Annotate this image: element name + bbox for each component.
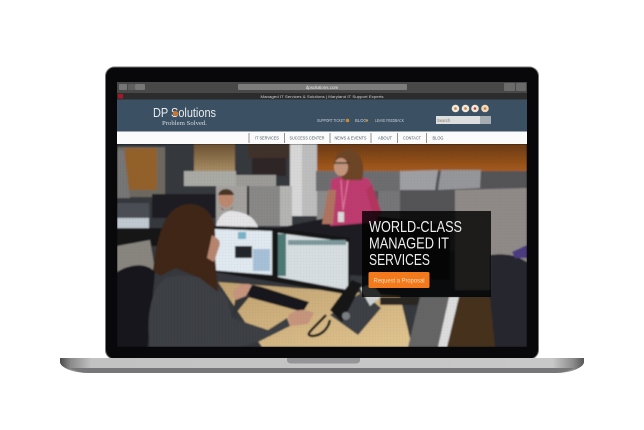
- desk phone: [309, 280, 382, 336]
- address bar: dpsolutions.com: [306, 85, 339, 90]
- logo: [153, 106, 216, 127]
- navigation bar: IT SERVICES: [255, 136, 279, 140]
- office background: [117, 144, 527, 290]
- right foreground: [380, 245, 527, 347]
- hero caption box: [362, 211, 491, 297]
- navigation bar: ABOUT: [378, 136, 392, 140]
- header links: [317, 118, 404, 123]
- navigation bar: CONTACT: [403, 136, 421, 140]
- keyboard: [244, 284, 309, 312]
- hero headline: SERVICES: [369, 252, 430, 269]
- request button: [368, 272, 430, 288]
- header links: LEAVE FEEDBACK: [375, 118, 404, 123]
- navigation bar: BLOG: [432, 136, 444, 140]
- laptop: [60, 67, 584, 373]
- address bar: [238, 84, 407, 90]
- search box: Search: [437, 118, 451, 123]
- logo: DP Solutions: [153, 106, 216, 120]
- navigation bar: [117, 132, 527, 144]
- hero headline: MANAGED IT: [369, 236, 449, 252]
- site header: [117, 100, 527, 132]
- header links: BLOG: [355, 118, 367, 123]
- navigation bar: NEWS & EVENTS: [334, 136, 367, 140]
- search box: [436, 116, 491, 124]
- hero headline: WORLD-CLASS: [369, 219, 462, 236]
- monitor wall: [214, 226, 350, 294]
- header links: SUPPORT TICKET: [317, 118, 345, 123]
- trackpad notch: [287, 358, 360, 364]
- desk: [218, 282, 412, 347]
- seated man: [216, 189, 258, 227]
- social icons: [452, 105, 489, 112]
- browser chrome: [117, 82, 527, 100]
- right monitor: [278, 233, 348, 290]
- left monitor: [210, 229, 272, 275]
- logo: Problem Solved.: [162, 120, 207, 127]
- laptop lid bezel: [106, 67, 538, 359]
- hero headline: [369, 221, 462, 265]
- tab title: Managed IT Services & Solutions | Maryland IT Support Experts: [260, 94, 384, 99]
- browser buttons: [118, 83, 526, 98]
- navigation bar: SUCCESS CENTER: [290, 136, 324, 140]
- office chair: [117, 265, 155, 347]
- request button: Request a Proposal: [374, 278, 424, 284]
- seated woman: [149, 204, 314, 347]
- laptop base: [60, 358, 584, 373]
- standing woman in pink: [322, 149, 382, 226]
- hero photo: [117, 144, 527, 347]
